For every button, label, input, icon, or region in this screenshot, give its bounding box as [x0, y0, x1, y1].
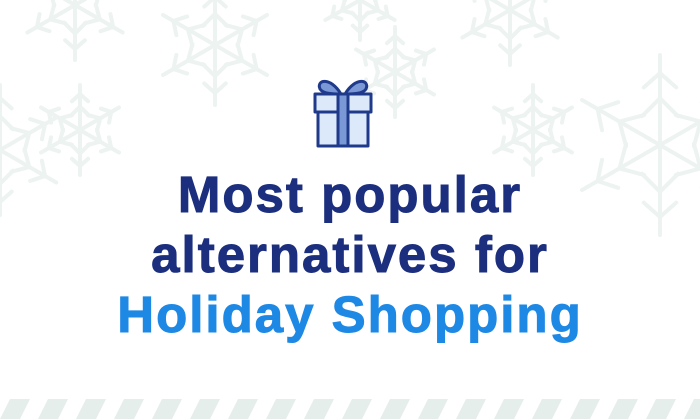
- title: Holiday Shopping: [117, 286, 583, 343]
- title: alternatives for: [151, 226, 549, 283]
- bottom stripes: [0, 399, 700, 419]
- title: [117, 166, 583, 343]
- title: Most popular: [178, 166, 522, 223]
- icon: gift: [314, 80, 372, 148]
